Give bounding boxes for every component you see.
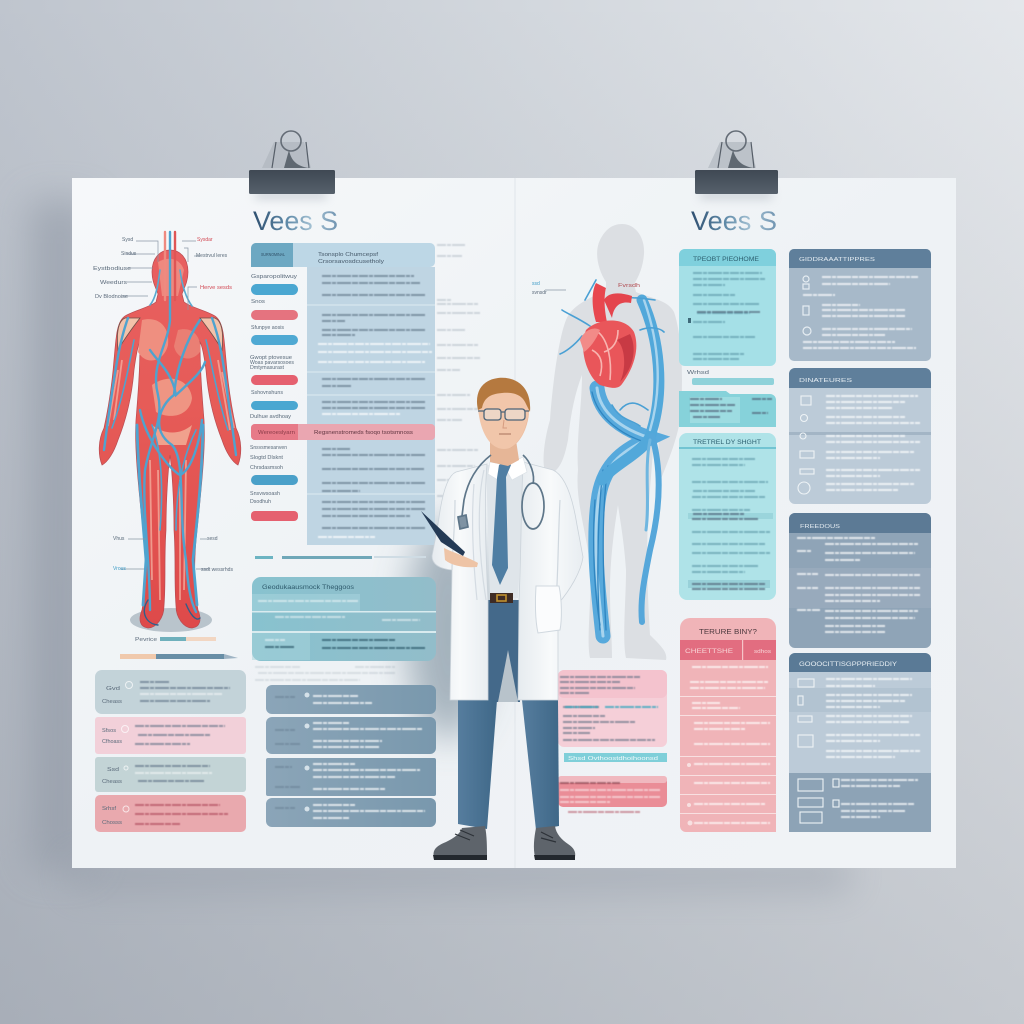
left column labels and pills: Dulhue avdhoay [250,414,292,420]
callout labels: Sysdar [197,237,213,243]
panel: left info cards: Cheass [102,699,123,705]
lab coat [432,464,488,700]
small teal bar: Wrhsd [687,370,709,376]
callout labels: sesd [207,536,218,542]
panel: left info cards: Gvd [106,686,120,692]
panel: main blue treatment panel: Dsodhuh [250,499,271,505]
panel: left info cards: Ssd [107,767,119,773]
panel: slate fourth: GOOOCITTISGPPPRIEDDIY [799,662,897,668]
figure caption bars: Pevrice [135,637,157,643]
panel: main blue treatment panel: Slogtd Dlsknt [250,455,284,461]
left column labels and pills: Snos [251,299,266,305]
panel: slate second: DINATEURES [799,378,852,384]
panel: slate third: FREEDOUS [800,524,840,530]
callout labels: Herve sesds [200,285,233,291]
red highlight bar [251,424,435,440]
teal strip [564,753,667,762]
panel: slate top: GIDDRAAATTIPPRES [799,257,875,263]
panel: left info cards: Sfsos [102,728,117,734]
panel: pink therapy table: sdhos [754,649,772,655]
left column labels and pills: Gsparopolitwuy [251,274,298,280]
panel: teal middle [679,391,776,427]
floor ellipse [130,608,212,632]
red note [558,776,667,807]
figure caption bars [120,637,238,659]
left column labels and pills: Woas pavarsosoes [250,360,295,366]
panel: slate second [789,368,931,504]
right text column [307,267,435,545]
panel: slate stack [266,685,436,827]
panel: main blue treatment panel: Snsvsmesanven [250,445,287,451]
collar [488,457,527,480]
panel: main blue treatment panel: Crsorsavosdcusetholy [318,259,385,265]
ghost silhouette [544,224,682,660]
panel: left info cards: Cheass [102,779,123,785]
panel: main blue treatment panel: Chrsdasmsoh [250,465,283,471]
side text column [437,245,480,525]
callout labels: Sindus [121,251,137,257]
callout labels: Mestrvul leres [196,253,228,259]
panel: slate fourth [789,653,931,832]
title: right: Vees S [691,206,777,236]
callout labels: ssdt wessrhds [201,567,233,573]
panel: pink notes: Shsd Ovthoostdhoihoonsd [568,756,658,762]
panel header band [251,243,435,267]
left column labels and pills: Gwopt ptovesue [250,355,292,361]
body silhouette [99,250,241,628]
panel: pink therapy table [680,618,776,832]
label near heart: ssd [532,281,540,287]
poster sheet [72,178,956,868]
panel: teal lower [679,433,776,600]
left column labels and pills: Sfunpye aosis [251,325,285,331]
left column labels and pills [250,274,298,420]
callout labels: Vrous [113,566,126,572]
stethoscope [458,455,544,529]
panel: main blue treatment panel: Regsnenstromeds fsoqo tsotsmnoss [314,430,413,436]
hand [444,548,478,567]
callout labels: Dv Blodnoise [95,294,128,300]
faint caption [568,811,640,813]
left column labels and pills: Dmtymasurast [250,365,285,371]
veins [104,232,236,625]
binder clip: left [249,131,335,194]
tie [492,463,511,585]
panel: main blue treatment panel: Tsonsplo Chumcepsf [318,252,379,258]
callout labels: Sysd [122,237,133,243]
left column labels and pills: Sshovnshuns [251,390,284,396]
muscles and organs [108,259,234,600]
blue vein bundle [560,280,664,636]
callout labels: Vhus [113,536,125,542]
title: left: Vees S [253,206,338,236]
small teal bar [687,370,774,385]
neck and head [477,378,530,466]
coat pocket [535,586,561,633]
callout lines [120,241,209,569]
panel: teal top [679,249,776,366]
heart [580,283,636,388]
panel: main blue treatment panel [250,243,435,545]
label near heart: Fvrsdh [618,283,640,289]
doctor [421,378,583,860]
panel: teal top: TPEOBT PIEOHOME [693,256,760,263]
trousers [458,600,559,830]
tablet [421,511,465,556]
label near heart: svnsdr [532,290,547,296]
panel: left info cards: Srhsf [102,806,117,812]
panel: left info cards: Cfhoass [102,739,123,745]
anatomy figure with labels [93,232,241,632]
panel: pink therapy table: TERURE BINY? [699,629,757,636]
circulatory system with heart [560,280,664,636]
panel: slate third [789,513,931,648]
panel: main blue treatment panel: Wereoeslyarn [258,430,295,436]
callout labels: Weedurs [100,280,128,286]
binder clip: right [695,131,778,194]
panel: pink therapy table: CHEETTSHE [685,649,733,655]
shoes [433,826,575,860]
glasses [478,409,529,420]
panel: left info cards: Chosss [102,820,123,826]
shirt [486,465,525,598]
panel: slate top [789,249,931,361]
panel: main blue treatment panel: SURNOMINAL [261,252,285,257]
panel: main blue treatment panel: Snsvwsoash [250,491,280,497]
panel: teal summary: Geodukaausmock Theggoos [262,585,354,591]
bar under main panel [255,556,426,559]
faint text below teal panel [255,667,395,680]
panel: left info cards [95,670,246,832]
panel: teal lower: TRETREL DY SHGHT [693,439,761,446]
label near heart [532,281,640,296]
panel: pink notes [558,670,667,812]
callout labels: Eystbodiuse [93,266,131,272]
callout labels [93,237,233,573]
belt [490,593,513,603]
panel: teal summary [252,577,436,661]
